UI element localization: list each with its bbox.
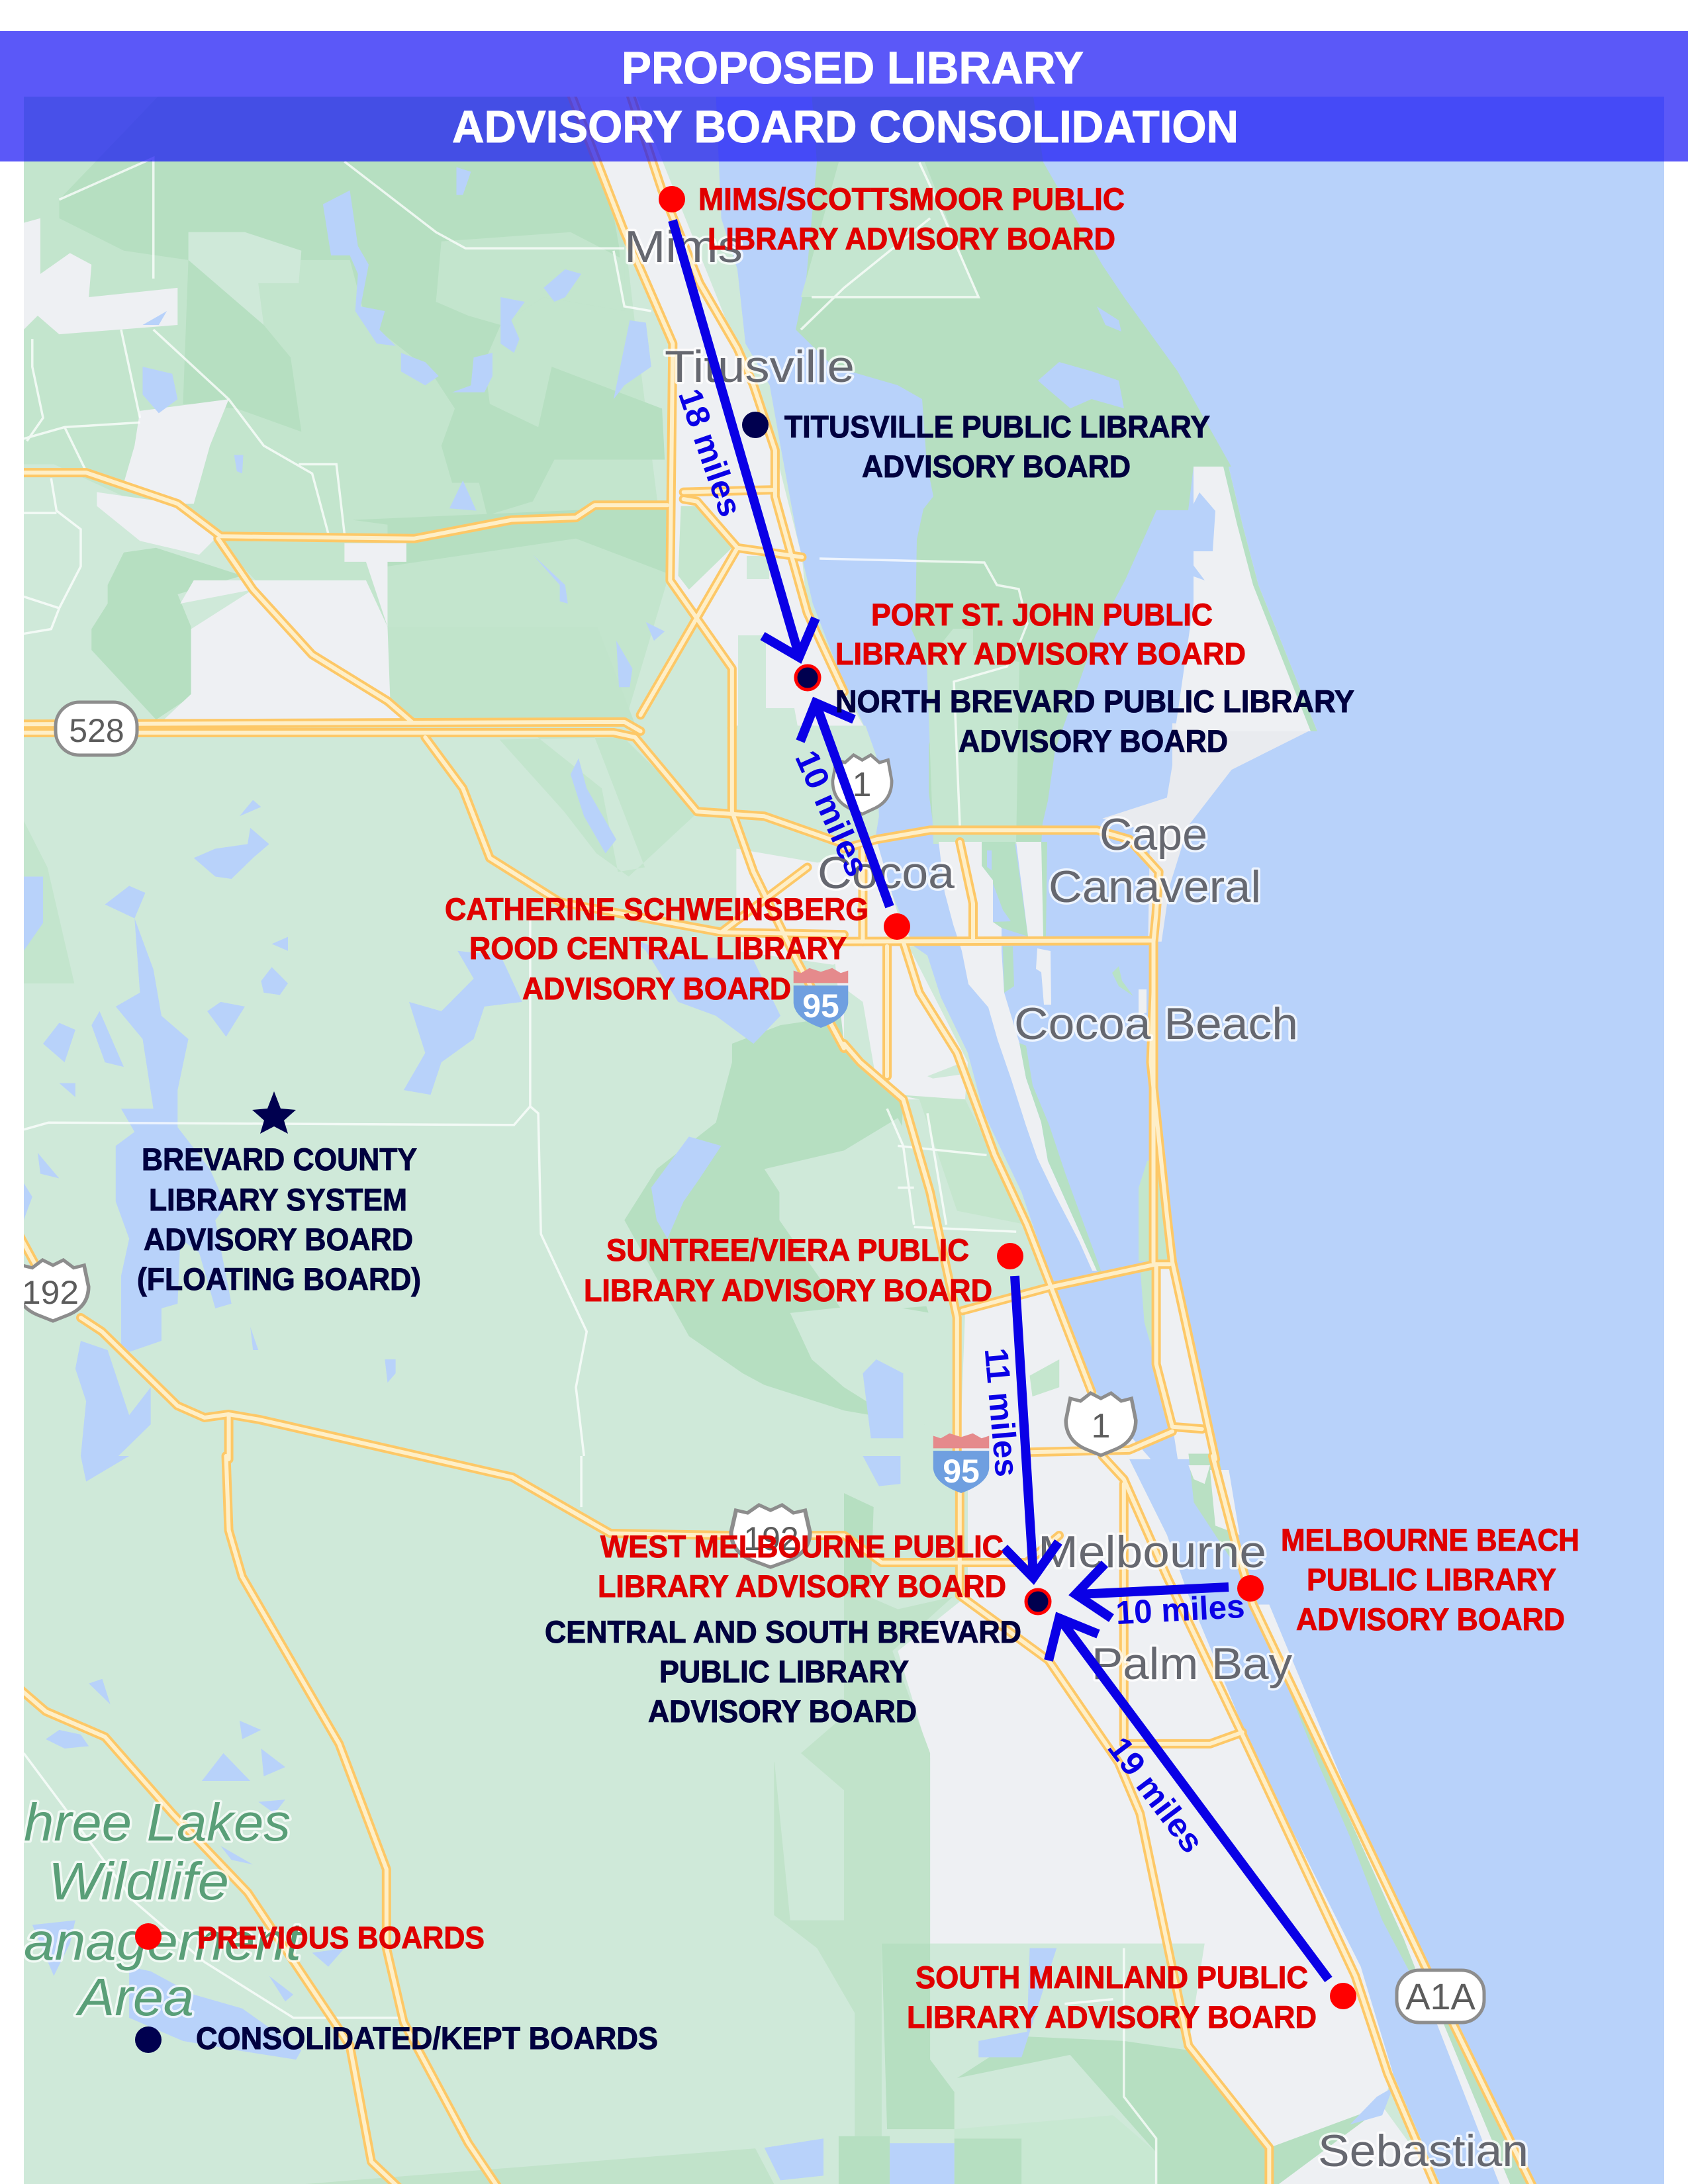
- legend label: previous boards: PREVIOUS BOARDS: [197, 1920, 485, 1955]
- arrow: Melbourne Beach to West Melbourne, 10 miles: [1076, 1564, 1229, 1618]
- marker: South Mainland: [1330, 1983, 1356, 2009]
- title text: ADVISORY BOARD CONSOLIDATION: [452, 101, 1239, 152]
- label: Catherine Schweinsberg Rood board: ROOD CENTRAL LIBRARY: [469, 931, 847, 966]
- title banner: [0, 31, 1688, 161]
- distance label: 18 miles: 18 miles: [671, 384, 749, 522]
- label: Melbourne Beach board: ADVISORY BOARD: [1296, 1602, 1565, 1637]
- map city labels: Canaveral: [1049, 862, 1261, 912]
- arrow: Catherine Schweinsberg Rood to Port St. John, 10 miles: [800, 703, 890, 907]
- label: Mims/Scottsmoor board: [698, 181, 1125, 256]
- map city labels: Sebastian: [1318, 2126, 1528, 2176]
- label: Brevard County floating board: LIBRARY SYSTEM: [149, 1182, 407, 1217]
- wildlife area label: anagement: [24, 1912, 303, 1971]
- legend: [135, 1920, 658, 2056]
- arrow: South Mainland to West Melbourne, 19 miles: [1049, 1618, 1329, 1979]
- label: North Brevard board: NORTH BREVARD PUBLIC LIBRARY: [835, 684, 1354, 719]
- label: Central and South Brevard board: CENTRAL AND SOUTH BREVARD: [545, 1614, 1021, 1649]
- port st john green patches: [738, 556, 798, 725]
- label: Brevard County floating board: ADVISORY BOARD: [144, 1222, 413, 1257]
- label: Port St. John board: [835, 597, 1246, 671]
- label: Catherine Schweinsberg Rood board: [445, 891, 868, 1006]
- label: Port St. John board: LIBRARY ADVISORY BOARD: [835, 636, 1246, 671]
- distance label: 10 miles north: 10 miles: [788, 745, 876, 882]
- map city labels: [624, 222, 1528, 2176]
- marker: Suntree/Viera: [997, 1243, 1023, 1269]
- label: Brevard County floating board: (FLOATING BOARD): [137, 1261, 421, 1297]
- label: North Brevard board: ADVISORY BOARD: [959, 723, 1228, 758]
- label: Brevard County floating board: BREVARD COUNTY: [142, 1142, 417, 1177]
- route shield I-95 south: 95: [943, 1453, 980, 1490]
- label: Melbourne Beach board: [1281, 1522, 1579, 1637]
- route shield A1A: A1A: [1405, 1976, 1476, 2017]
- land: north section: [24, 93, 867, 731]
- label: Melbourne Beach board: MELBOURNE BEACH: [1281, 1522, 1579, 1557]
- legend marker: previous boards: [135, 1923, 162, 1950]
- lakes: south: [32, 1456, 823, 2180]
- route shield I-95 north: [794, 968, 848, 1028]
- distance label: 11 miles: 11 miles: [978, 1346, 1025, 1479]
- label: Melbourne Beach board: PUBLIC LIBRARY: [1307, 1562, 1556, 1597]
- land: merritt island and cape: [796, 93, 1317, 1274]
- label: Mims/Scottsmoor board: MIMS/SCOTTSMOOR PUBLIC: [698, 181, 1125, 216]
- route shield A1A: [1397, 1970, 1484, 2023]
- marker: Catherine Schweinsberg Rood: [884, 913, 910, 940]
- label: South Mainland board: SOUTH MAINLAND PUBLIC: [915, 1960, 1308, 1995]
- label: Mims/Scottsmoor board: LIBRARY ADVISORY BOARD: [708, 221, 1115, 256]
- label: West Melbourne board: LIBRARY ADVISORY BOARD: [598, 1569, 1006, 1604]
- water base: [716, 97, 1664, 2184]
- lakes: north: [142, 167, 665, 687]
- wildlife area label: [24, 1793, 303, 2026]
- route shield 192 central: [731, 1505, 810, 1567]
- label: Suntree/Viera board: LIBRARY ADVISORY BOARD: [584, 1273, 992, 1308]
- wildlife area label: Wildlife: [48, 1852, 229, 1911]
- label: Central and South Brevard board: PUBLIC LIBRARY: [659, 1654, 909, 1689]
- legend marker: consolidated boards: [135, 2026, 162, 2053]
- marker: Port St. John and North Brevard: [796, 666, 820, 690]
- route shield US 1 south: [1066, 1393, 1136, 1455]
- label: Suntree/Viera board: [584, 1232, 992, 1308]
- distance label: 10 miles south: 10 miles: [1115, 1588, 1246, 1631]
- marker: Titusville: [742, 412, 769, 438]
- marker: West Melbourne and Central/South Brevard: [1026, 1590, 1050, 1614]
- label: Catherine Schweinsberg Rood board: ADVISORY BOARD: [522, 971, 791, 1006]
- route shield US 1 north: [833, 755, 892, 814]
- route shield 192 west: 192: [22, 1274, 79, 1311]
- label: Central and South Brevard board: ADVISORY BOARD: [648, 1694, 917, 1729]
- minor roads: [24, 158, 1156, 2184]
- map city labels: Mims: [624, 222, 743, 272]
- route shield I-95 north: 95: [802, 987, 839, 1024]
- route shield 528: [56, 702, 137, 755]
- label: Titusville board: [784, 409, 1210, 484]
- map city labels: Palm Bay: [1092, 1639, 1292, 1689]
- route shield US 1 north: 1: [853, 766, 871, 804]
- arrow: Mims to Port St. John, 18 miles: [673, 220, 816, 657]
- map city labels: Cocoa: [818, 848, 955, 898]
- route shield 192 west: [17, 1260, 89, 1321]
- icon: star, Brevard County board: [252, 1091, 296, 1134]
- label: Port St. John board: PORT ST. JOHN PUBLIC: [871, 597, 1213, 632]
- map city labels: Titusville: [665, 341, 855, 392]
- wildlife area label: hree Lakes: [24, 1793, 291, 1852]
- route shield US 1 south: 1: [1092, 1407, 1110, 1445]
- arrow: Suntree/Viera to West Melbourne, 11 miles: [1004, 1276, 1058, 1578]
- map city labels: Cape: [1100, 809, 1207, 860]
- label: North Brevard board: [835, 684, 1354, 758]
- label: South Mainland board: LIBRARY ADVISORY BOARD: [907, 1999, 1317, 2034]
- wildlife area label: Area: [75, 1968, 194, 2026]
- marker: Mims/Scottsmoor: [659, 186, 685, 212]
- distance label: 19 miles: 19 miles: [1101, 1730, 1211, 1860]
- label: South Mainland board: [907, 1960, 1317, 2034]
- route shield 192 central: 192: [743, 1520, 799, 1557]
- map city labels: Cocoa Beach: [1014, 999, 1298, 1049]
- label: Central and South Brevard board: [545, 1614, 1021, 1729]
- label: Catherine Schweinsberg Rood board: CATHERINE SCHWEINSBERG: [445, 891, 868, 927]
- route shield 528: 528: [69, 712, 124, 749]
- label: Suntree/Viera board: SUNTREE/VIERA PUBLIC: [606, 1232, 969, 1267]
- land: south section: [24, 1453, 1538, 2184]
- lakes: central: [24, 758, 780, 1456]
- marker: Melbourne Beach: [1237, 1575, 1264, 1602]
- map city labels: Melbourne: [1038, 1527, 1266, 1577]
- route shield I-95 south: [933, 1433, 989, 1493]
- legend label: consolidated boards: CONSOLIDATED/KEPT BOARDS: [196, 2021, 658, 2056]
- land: central section: [24, 723, 1315, 1459]
- label: West Melbourne board: [598, 1529, 1006, 1604]
- label: West Melbourne board: WEST MELBOURNE PUBLIC: [600, 1529, 1004, 1564]
- label: Brevard County floating board: [137, 1142, 421, 1297]
- title text: [452, 42, 1239, 152]
- title text: PROPOSED LIBRARY: [622, 42, 1084, 93]
- label: Titusville board: ADVISORY BOARD: [862, 449, 1131, 484]
- label: Titusville board: TITUSVILLE PUBLIC LIBRARY: [784, 409, 1210, 444]
